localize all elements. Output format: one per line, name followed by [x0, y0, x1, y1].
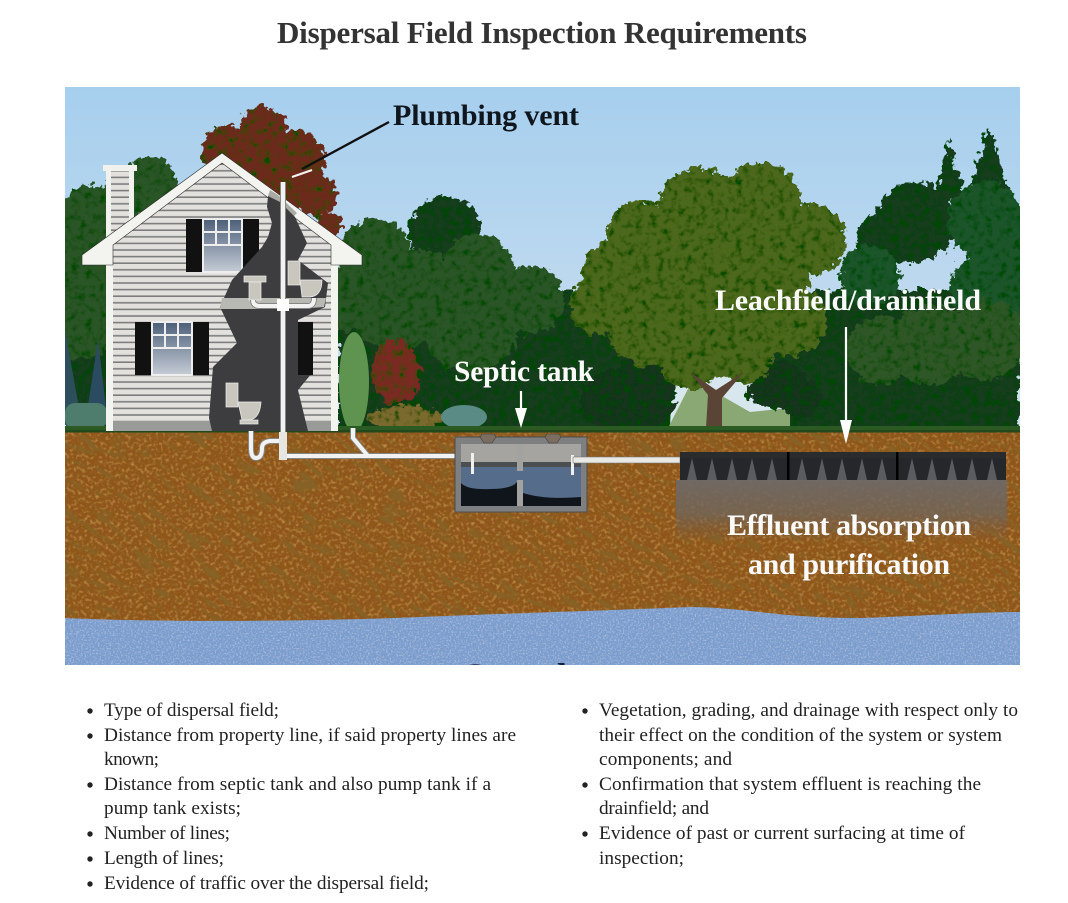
- siding wall: [113, 164, 331, 421]
- left bullet list: Number of lines;: [104, 823, 230, 844]
- lower toilet: [226, 383, 261, 424]
- plumbing pipes: [251, 182, 456, 460]
- cutaway: [209, 196, 328, 431]
- upper toilet and sink: [244, 261, 322, 300]
- label: septic tank with arrow: [454, 356, 595, 428]
- label: effluent absorption: [727, 509, 971, 581]
- foreground foliage and olive oak: [570, 163, 846, 431]
- baffle: [517, 462, 523, 506]
- label: groundwater (clipped): Groundwater: [460, 656, 640, 696]
- right bullet list: [582, 700, 1018, 869]
- left trees: [40, 157, 564, 373]
- upper window: [186, 219, 259, 272]
- right bullet list: drainfield; and: [599, 798, 709, 819]
- left bullet list: Evidence of traffic over the dispersal field;: [104, 873, 429, 894]
- soil: [65, 431, 1020, 631]
- right bullet list: Confirmation that system effluent is reaching the: [599, 774, 981, 795]
- right bullet list: Evidence of past or current surfacing at time of: [599, 823, 966, 844]
- title: Dispersal Field Inspection Requirements: [277, 15, 807, 50]
- label: leachfield with arrow: [715, 284, 981, 444]
- roof: [82, 153, 362, 265]
- label: effluent absorption: Effluent absorption: [727, 509, 971, 542]
- label: septic tank with arrow: Septic tank: [454, 356, 595, 388]
- roof cut section: [268, 190, 297, 218]
- right bullet list: Vegetation, grading, and drainage with respect only to: [599, 700, 1018, 721]
- corner boards: [106, 260, 113, 431]
- list bullets: [582, 708, 588, 837]
- drainfield chambers: [680, 452, 1006, 480]
- sludge: [461, 482, 517, 506]
- left bullet list: known;: [104, 749, 159, 770]
- scum band: [461, 462, 581, 467]
- septic tank: [455, 434, 587, 512]
- air space: [461, 444, 581, 464]
- left bullet list: Length of lines;: [104, 848, 224, 869]
- right bullet list: inspection;: [599, 848, 684, 869]
- rear shutter: [298, 322, 313, 375]
- red tree behind house: [201, 106, 342, 237]
- left bullet list: Distance from property line, if said property lines are: [104, 725, 516, 746]
- lower window: [135, 322, 209, 375]
- left bullet list: Distance from septic tank and also pump tank if a: [104, 774, 491, 795]
- groundwater: [65, 607, 1020, 665]
- house: [82, 153, 362, 431]
- label: effluent absorption: and purification: [748, 548, 950, 581]
- chimney: [103, 165, 137, 238]
- right bullet list: components; and: [599, 749, 732, 770]
- floor slab: [220, 298, 326, 309]
- gravel absorption zone: [676, 480, 1007, 542]
- left bullet list: [87, 700, 516, 894]
- background trees: [40, 126, 1053, 435]
- back canopy dark: [65, 126, 1020, 435]
- tank shell: [455, 437, 587, 512]
- shrubs and small trees: [65, 330, 1020, 432]
- left bullet list: pump tank exists;: [104, 798, 241, 819]
- liquid: [461, 467, 581, 498]
- list bullets: [87, 708, 93, 887]
- ground line: [65, 430, 1020, 432]
- sky: [65, 87, 1020, 432]
- access risers: [480, 434, 561, 443]
- outlet pipe: [573, 457, 680, 463]
- label: leachfield with arrow: Leachfield/drainfield: [715, 284, 981, 317]
- tees: [471, 453, 574, 475]
- distant valley: [669, 376, 790, 426]
- oak trunk: [690, 372, 744, 428]
- right bullet list: their effect on the condition of the system or system: [599, 725, 1002, 746]
- label: plumbing vent with arrow: [292, 99, 579, 177]
- septic system illustration: [65, 87, 1020, 665]
- foundation: [112, 421, 332, 431]
- right trees: [836, 180, 1020, 316]
- left bullet list: Type of dispersal field;: [104, 700, 279, 721]
- label: plumbing vent with arrow: Plumbing vent: [393, 99, 579, 132]
